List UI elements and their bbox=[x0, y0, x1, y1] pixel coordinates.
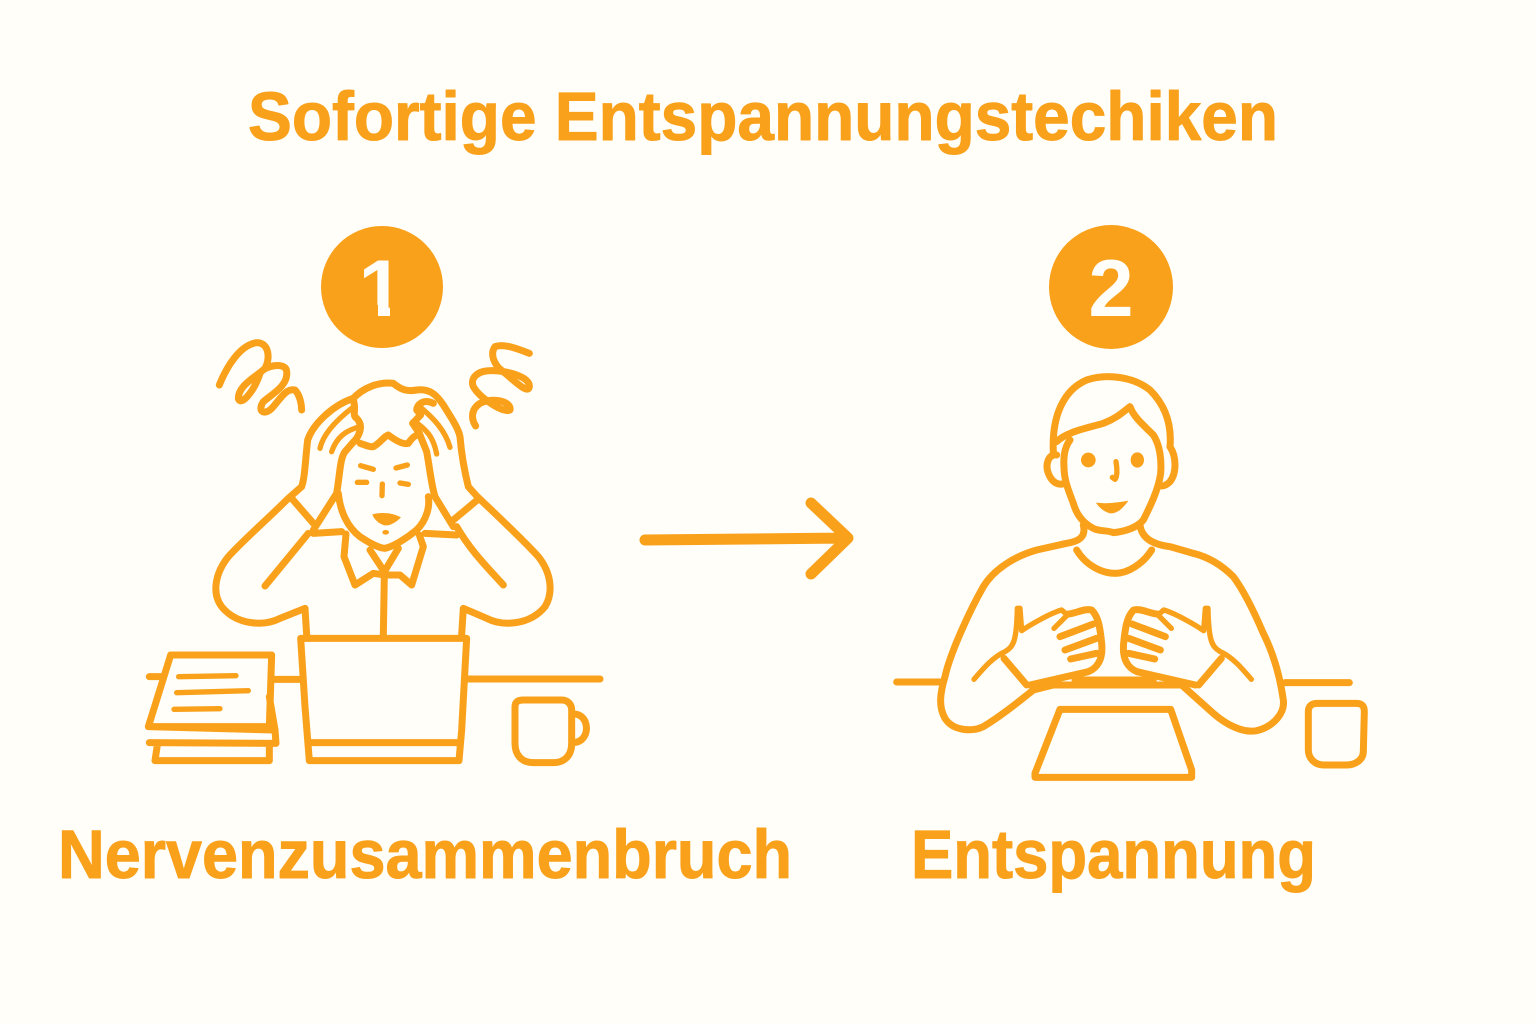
title: Sofortige Entspannungstechiken bbox=[248, 78, 1278, 155]
torso and arms bbox=[941, 525, 1283, 731]
arrow bbox=[645, 503, 848, 574]
head and hair bbox=[216, 383, 550, 635]
desk line bbox=[149, 677, 600, 679]
icon: mug bbox=[1308, 703, 1364, 765]
face details bbox=[1081, 452, 1144, 513]
right hand on chest bbox=[1123, 608, 1251, 685]
illustration: stressed person at desk bbox=[148, 343, 600, 763]
sweater neckline bbox=[1077, 550, 1152, 573]
face details bbox=[357, 465, 408, 535]
step 1 number badge: 1 bbox=[358, 244, 404, 334]
step 2 number badge: 2 bbox=[1088, 244, 1134, 334]
laptop bbox=[301, 638, 467, 761]
icon: right stress squiggle bbox=[472, 346, 529, 426]
icon: left stress squiggle bbox=[219, 343, 302, 412]
label: relaxation: Entspannung bbox=[911, 816, 1316, 893]
label: stress: Nervenzusammenbruch bbox=[58, 816, 792, 893]
step 2 number badge bbox=[1049, 225, 1173, 349]
forearms and cuffs bbox=[265, 498, 503, 586]
hands in hair bbox=[320, 408, 450, 454]
desk line bbox=[897, 680, 1349, 683]
left hand on chest bbox=[974, 608, 1102, 685]
illustration: relaxed person at desk bbox=[897, 377, 1364, 777]
shirt collar and placket bbox=[313, 532, 457, 635]
ears bbox=[1047, 447, 1175, 486]
head and face outline bbox=[1053, 377, 1170, 533]
icon: coffee mug bbox=[515, 700, 586, 763]
step 1 number badge bbox=[321, 226, 443, 348]
paper stack bbox=[148, 655, 276, 761]
tablet bbox=[1035, 709, 1192, 777]
